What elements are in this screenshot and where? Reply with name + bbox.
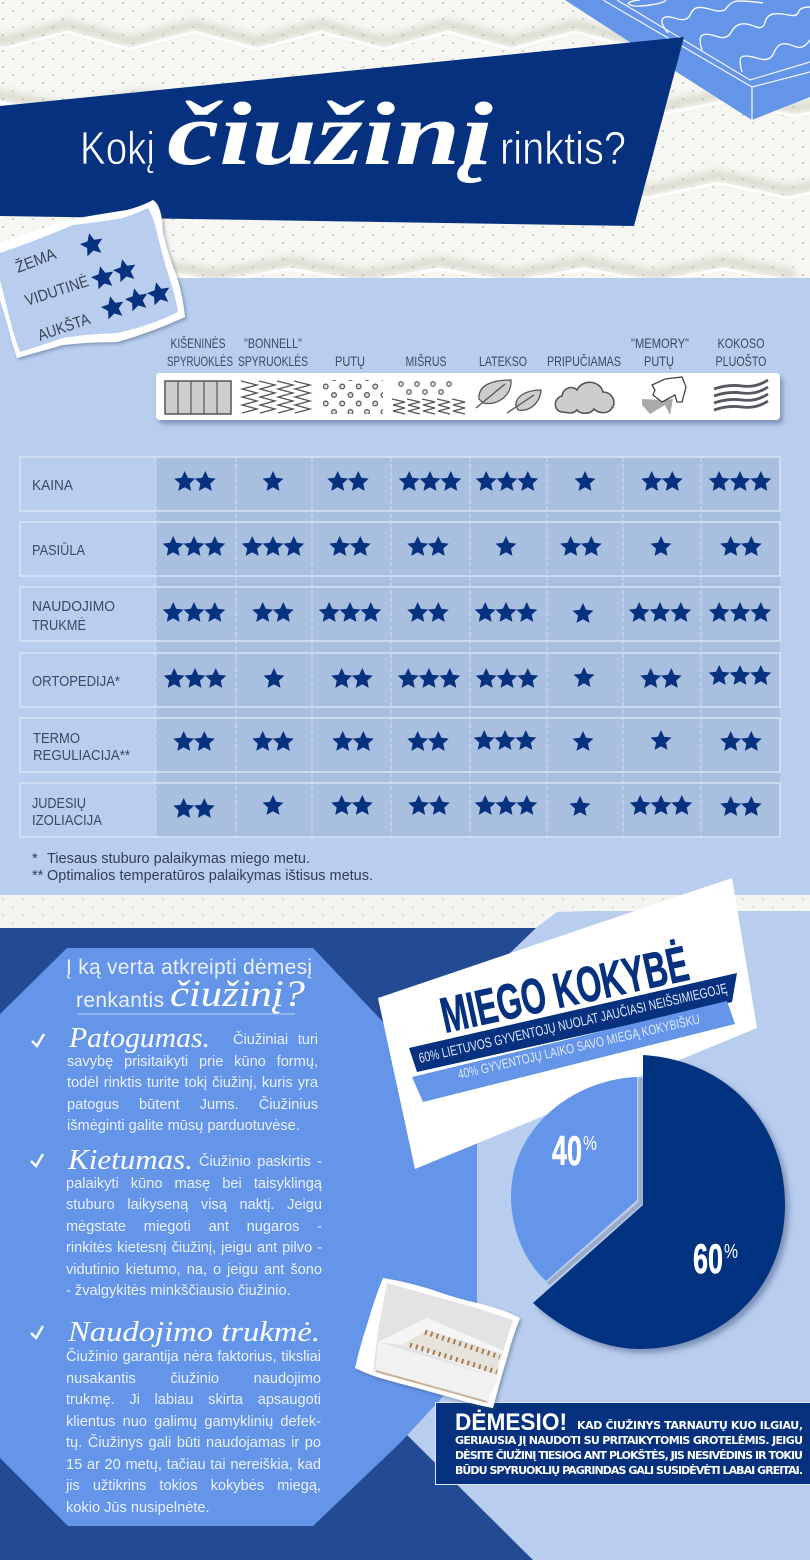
text: kietumas: - žvalgykitės minkščiausio čiužinio. xyxy=(66,1283,291,1299)
text: kietumas: mėgstate miegoti ant nugaros - xyxy=(66,1218,322,1234)
subheading: patogumas: Patogumas. xyxy=(68,1022,210,1054)
heading: what to pay attention to: renkantis xyxy=(76,989,164,1012)
pie slice: 60 percent xyxy=(533,1055,785,1349)
row: termo reguliacija stars xyxy=(173,730,762,751)
notice box: DĖMESIO! xyxy=(455,1409,567,1436)
comparison table xyxy=(20,457,780,838)
mattress type labels: PLUOŠTO xyxy=(716,353,767,369)
table row labels: TERMO xyxy=(33,731,80,747)
text: naudojimo trukme: jis užtikrins tokios kokybės miegą, xyxy=(66,1478,321,1494)
legend labels xyxy=(13,244,93,345)
table row labels: KAINA xyxy=(32,478,73,494)
legend card xyxy=(0,200,185,358)
mattress type labels: KIŠENINĖS xyxy=(170,334,226,351)
mattress type labels: SPYRUOKLĖS xyxy=(238,352,308,369)
background: lower mattress texture strip xyxy=(0,895,810,931)
legend labels: VIDUTINĖ xyxy=(22,271,91,310)
row: judesiu izoliacija stars xyxy=(173,795,762,818)
table row labels: TRUKMĖ xyxy=(32,616,86,634)
mattress type labels: MIŠRUS xyxy=(406,353,446,369)
mattress type labels: PUTŲ xyxy=(644,353,674,369)
footnotes: ** xyxy=(32,868,44,884)
text: naudojimo trukme xyxy=(66,1348,321,1516)
pie label: 60%: % xyxy=(724,1241,738,1263)
row: naudojimo trukme stars xyxy=(163,602,771,623)
legend labels: ŽEMA xyxy=(13,244,59,277)
footnotes: * xyxy=(32,851,38,867)
pie chart xyxy=(511,1055,785,1349)
footnotes: Tiesaus stuburo palaikymas miego metu. xyxy=(47,851,310,867)
icon bar xyxy=(156,373,780,420)
text: naudojimo trukme: nusakantis čiužinio naudojimo xyxy=(66,1370,321,1386)
text: kietumas: stuburo laikyseną visą naktį. Jeigu xyxy=(66,1197,322,1213)
legend stars xyxy=(78,230,173,320)
sleep quality card xyxy=(378,878,757,1169)
ribbon: 60 percent xyxy=(409,973,737,1072)
pie slice: 40 percent xyxy=(511,1077,637,1281)
text: patogumas: patogus būtent Jums. Čiužinius xyxy=(67,1096,318,1112)
pie gap shadow xyxy=(548,1078,640,1284)
table row labels: REGULIACIJA** xyxy=(33,748,130,764)
table row labels xyxy=(32,478,130,829)
subheading: naudojimo trukme: Naudojimo trukmė. xyxy=(67,1316,320,1348)
text: naudojimo trukme: trukmę. Ji labiau skirta apsaugoti xyxy=(66,1392,321,1408)
mattress type labels: PRIPUČIAMAS xyxy=(547,353,621,369)
title xyxy=(80,85,626,184)
text: kietumas: palaikyti kūno masę bei taisyklingą xyxy=(66,1176,322,1192)
footnotes: Optimalios temperatūros palaikymas ištisus metus. xyxy=(47,868,373,884)
row: pasiula stars xyxy=(163,536,762,556)
table row labels: PASIŪLA xyxy=(32,543,85,559)
photo: bed frame with slats xyxy=(355,1278,520,1408)
table column separators xyxy=(156,457,701,838)
footnotes xyxy=(32,851,373,884)
background: top mattress texture xyxy=(0,0,810,282)
icon: pocket springs xyxy=(165,381,231,414)
title: čiužinį xyxy=(167,85,493,184)
text: kietumas: Čiužinio paskirtis - xyxy=(199,1154,322,1170)
text: naudojimo trukme: kokio Jūs nusipelnėte. xyxy=(66,1500,210,1516)
mattress type labels: LATEKSO xyxy=(479,353,527,369)
title: rinktis? xyxy=(500,122,626,174)
text: naudojimo trukme: 15 ar 20 metų, tačiau tai nereiškia, kad xyxy=(66,1456,321,1472)
text: patogumas: išmėginti galite mūsų parduotuvėse. xyxy=(67,1118,300,1134)
text: patogumas: Čiužiniai turi xyxy=(233,1032,318,1048)
icon: inflatable cloud xyxy=(555,382,614,413)
mattress type labels: SPYRUOKLĖS xyxy=(167,352,233,369)
pie label: 40%: % xyxy=(583,1133,597,1155)
table row labels: ORTOPEDIJA* xyxy=(32,674,120,690)
text: patogumas: savybę prisitaikyti prie kūno formų, xyxy=(67,1054,318,1070)
notice box: KAD ČIUŽINYS TARNAUTŲ KUO ILGIAU, xyxy=(577,1419,803,1432)
text: naudojimo trukme: klientus nuo galimų gamyklinių defek- xyxy=(66,1414,321,1430)
mattress type labels: "BONNELL" xyxy=(244,335,302,351)
notice box: GERIAUSIA JĮ NAUDOTI SU PRITAIKYTOMIS GROTELĖMIS. JEIGU xyxy=(455,1433,803,1447)
illustration: blue mattress with springs xyxy=(565,0,810,120)
table row outlines xyxy=(20,457,780,837)
text: kietumas xyxy=(66,1152,322,1299)
text: patogumas xyxy=(67,1030,318,1134)
text: naudojimo trukme: tų. Čiužinys gali būti naudojamas ir po xyxy=(66,1435,321,1451)
ribbon: 40 percent xyxy=(412,1001,735,1102)
table row labels: IZOLIACIJA xyxy=(32,813,102,829)
mattress type labels: "MEMORY" xyxy=(631,335,689,351)
background: dark blue section xyxy=(0,928,540,1560)
pie label: 40%: 40 xyxy=(552,1127,582,1174)
heading: what to pay attention to: Į ką verta atkreipti dėmesį xyxy=(66,956,312,979)
heading underline xyxy=(77,1013,295,1015)
table row labels: JUDESIŲ xyxy=(32,796,86,812)
icon: bonnell springs xyxy=(241,381,310,413)
subheading: kietumas: Kietumas. xyxy=(67,1144,193,1176)
mattress type labels: KOKOSO xyxy=(718,335,765,351)
title band xyxy=(0,37,684,226)
legend labels: AUKŠTA xyxy=(35,309,93,345)
row: kaina stars xyxy=(174,471,771,491)
pie label: 60%: 60 xyxy=(693,1235,723,1282)
icon: memory foam hand xyxy=(642,377,686,415)
notice box: DĖSITE ČIUŽINĮ TIESIOG ANT PLOKŠTĖS, JIS NESIVĖDINS IR TOKIU xyxy=(455,1448,803,1462)
icon: check 2 xyxy=(31,1154,43,1166)
mattress type labels: PUTŲ xyxy=(335,353,365,369)
panel: what to look for xyxy=(0,948,477,1526)
text: kietumas: vidutinio kietumo, na, o jeigu ant šono xyxy=(66,1262,322,1278)
text: naudojimo trukme: Čiužinio garantija nėra faktorius, tiksliai xyxy=(66,1349,321,1365)
icon: check 3 xyxy=(31,1326,43,1338)
icon: coconut fibre xyxy=(714,380,768,410)
icon: latex leaves xyxy=(476,380,541,413)
row: ortopedija stars xyxy=(164,665,771,688)
mattress type labels xyxy=(167,334,767,369)
background: light blue diagonal block xyxy=(403,911,810,1560)
notice box xyxy=(436,1402,810,1484)
icon: foam xyxy=(323,380,383,414)
ribbon: 40 percent: 40% GYVENTOJŲ LAIKO SAVO MIEGĄ KOKYBIŠKU xyxy=(456,1012,701,1082)
title: Kokį xyxy=(80,122,155,174)
heading: what to pay attention to: čiužinį? xyxy=(170,974,306,1015)
heading: what to pay attention to xyxy=(66,956,312,1015)
icon: mixed xyxy=(392,382,465,414)
table row labels: NAUDOJIMO xyxy=(32,599,115,615)
icon: check 1 xyxy=(32,1034,44,1046)
text: patogumas: todėl rinktis turite tokį čiužinį, kuris yra xyxy=(67,1075,318,1091)
notice box: BŪDU SPYRUOKLIŲ PAGRINDAS GALI SUSIDĖVĖTI LABAI GREITAI. xyxy=(455,1463,803,1477)
text: kietumas: rinkitės kietesnį čiužinį, jeigu ant pilvo - xyxy=(66,1240,322,1256)
